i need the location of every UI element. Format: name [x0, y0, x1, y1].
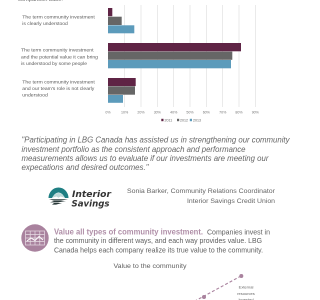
logo: Interior Savings: Savings [72, 198, 110, 210]
legend [161, 118, 201, 122]
bars: clearly understood [108, 8, 134, 33]
x axis labels: 50% [186, 111, 194, 115]
section heading and body: Value all types of community investment. [54, 227, 203, 236]
x axis labels: 40% [170, 111, 178, 115]
chart title: Value to the community [114, 263, 187, 270]
category labels: The term community investment [21, 48, 94, 54]
section heading and body [54, 227, 270, 254]
data label: external resources invested: resources [237, 291, 255, 296]
category labels: and the potential value it can bring [21, 55, 98, 61]
testimonial quote: "Participating in LBG Canada has assisted us in strengthening our community [22, 136, 290, 145]
x axis labels: 90% [252, 111, 260, 115]
category labels: The term community investment [22, 80, 95, 86]
x axis labels: 20% [137, 111, 145, 115]
attribution: Interior Savings Credit Union [187, 198, 275, 205]
testimonial quote: measurements allows us to evaluate if our investments are meeting our [22, 154, 269, 163]
x axis labels: 80% [235, 111, 243, 115]
x axis labels: 0% [105, 111, 111, 115]
icon: table with line chart [21, 224, 49, 252]
testimonial quote [22, 136, 290, 172]
category labels: and our team's role is not clearly [22, 86, 95, 92]
x axis labels: 30% [154, 111, 162, 115]
category labels: is clearly understood [22, 21, 68, 27]
attribution [127, 188, 276, 205]
x axis labels: 70% [219, 111, 227, 115]
legend: 2011 [164, 118, 172, 122]
logo: Interior Savings: Interior [72, 189, 111, 200]
category labels [21, 14, 98, 99]
data label: external resources invested: External [239, 284, 253, 289]
legend: 2013 [193, 118, 201, 122]
section heading and body: Companies invest in [207, 227, 270, 236]
section heading and body: Canada helps each company realize its true value to the community. [54, 245, 263, 254]
section heading and body: the community in different ways, and each way provides value. LBG [54, 236, 262, 245]
testimonial quote: investment portfolio as the consistent approach and performance [22, 145, 246, 154]
attribution: Sonia Barker, Community Relations Coordinator [127, 188, 276, 195]
logo: Interior Savings [48, 188, 111, 210]
category labels: is understood by some people [21, 61, 87, 67]
testimonial quote: expecations and desired outcomes." [22, 163, 150, 172]
category labels: understood [22, 93, 48, 99]
data label: external resources invested [237, 284, 255, 300]
x axis labels [105, 111, 260, 115]
legend: 2012 [180, 118, 188, 122]
category labels: The term community investment [22, 14, 95, 20]
bars: role not clearly understood [108, 78, 136, 103]
bar chart: understanding of community investment [21, 5, 260, 122]
value chart: dashed trend line [195, 274, 243, 300]
x axis labels: 10% [121, 111, 129, 115]
x axis labels: 60% [203, 111, 211, 115]
bars: understood by some people [108, 43, 241, 68]
